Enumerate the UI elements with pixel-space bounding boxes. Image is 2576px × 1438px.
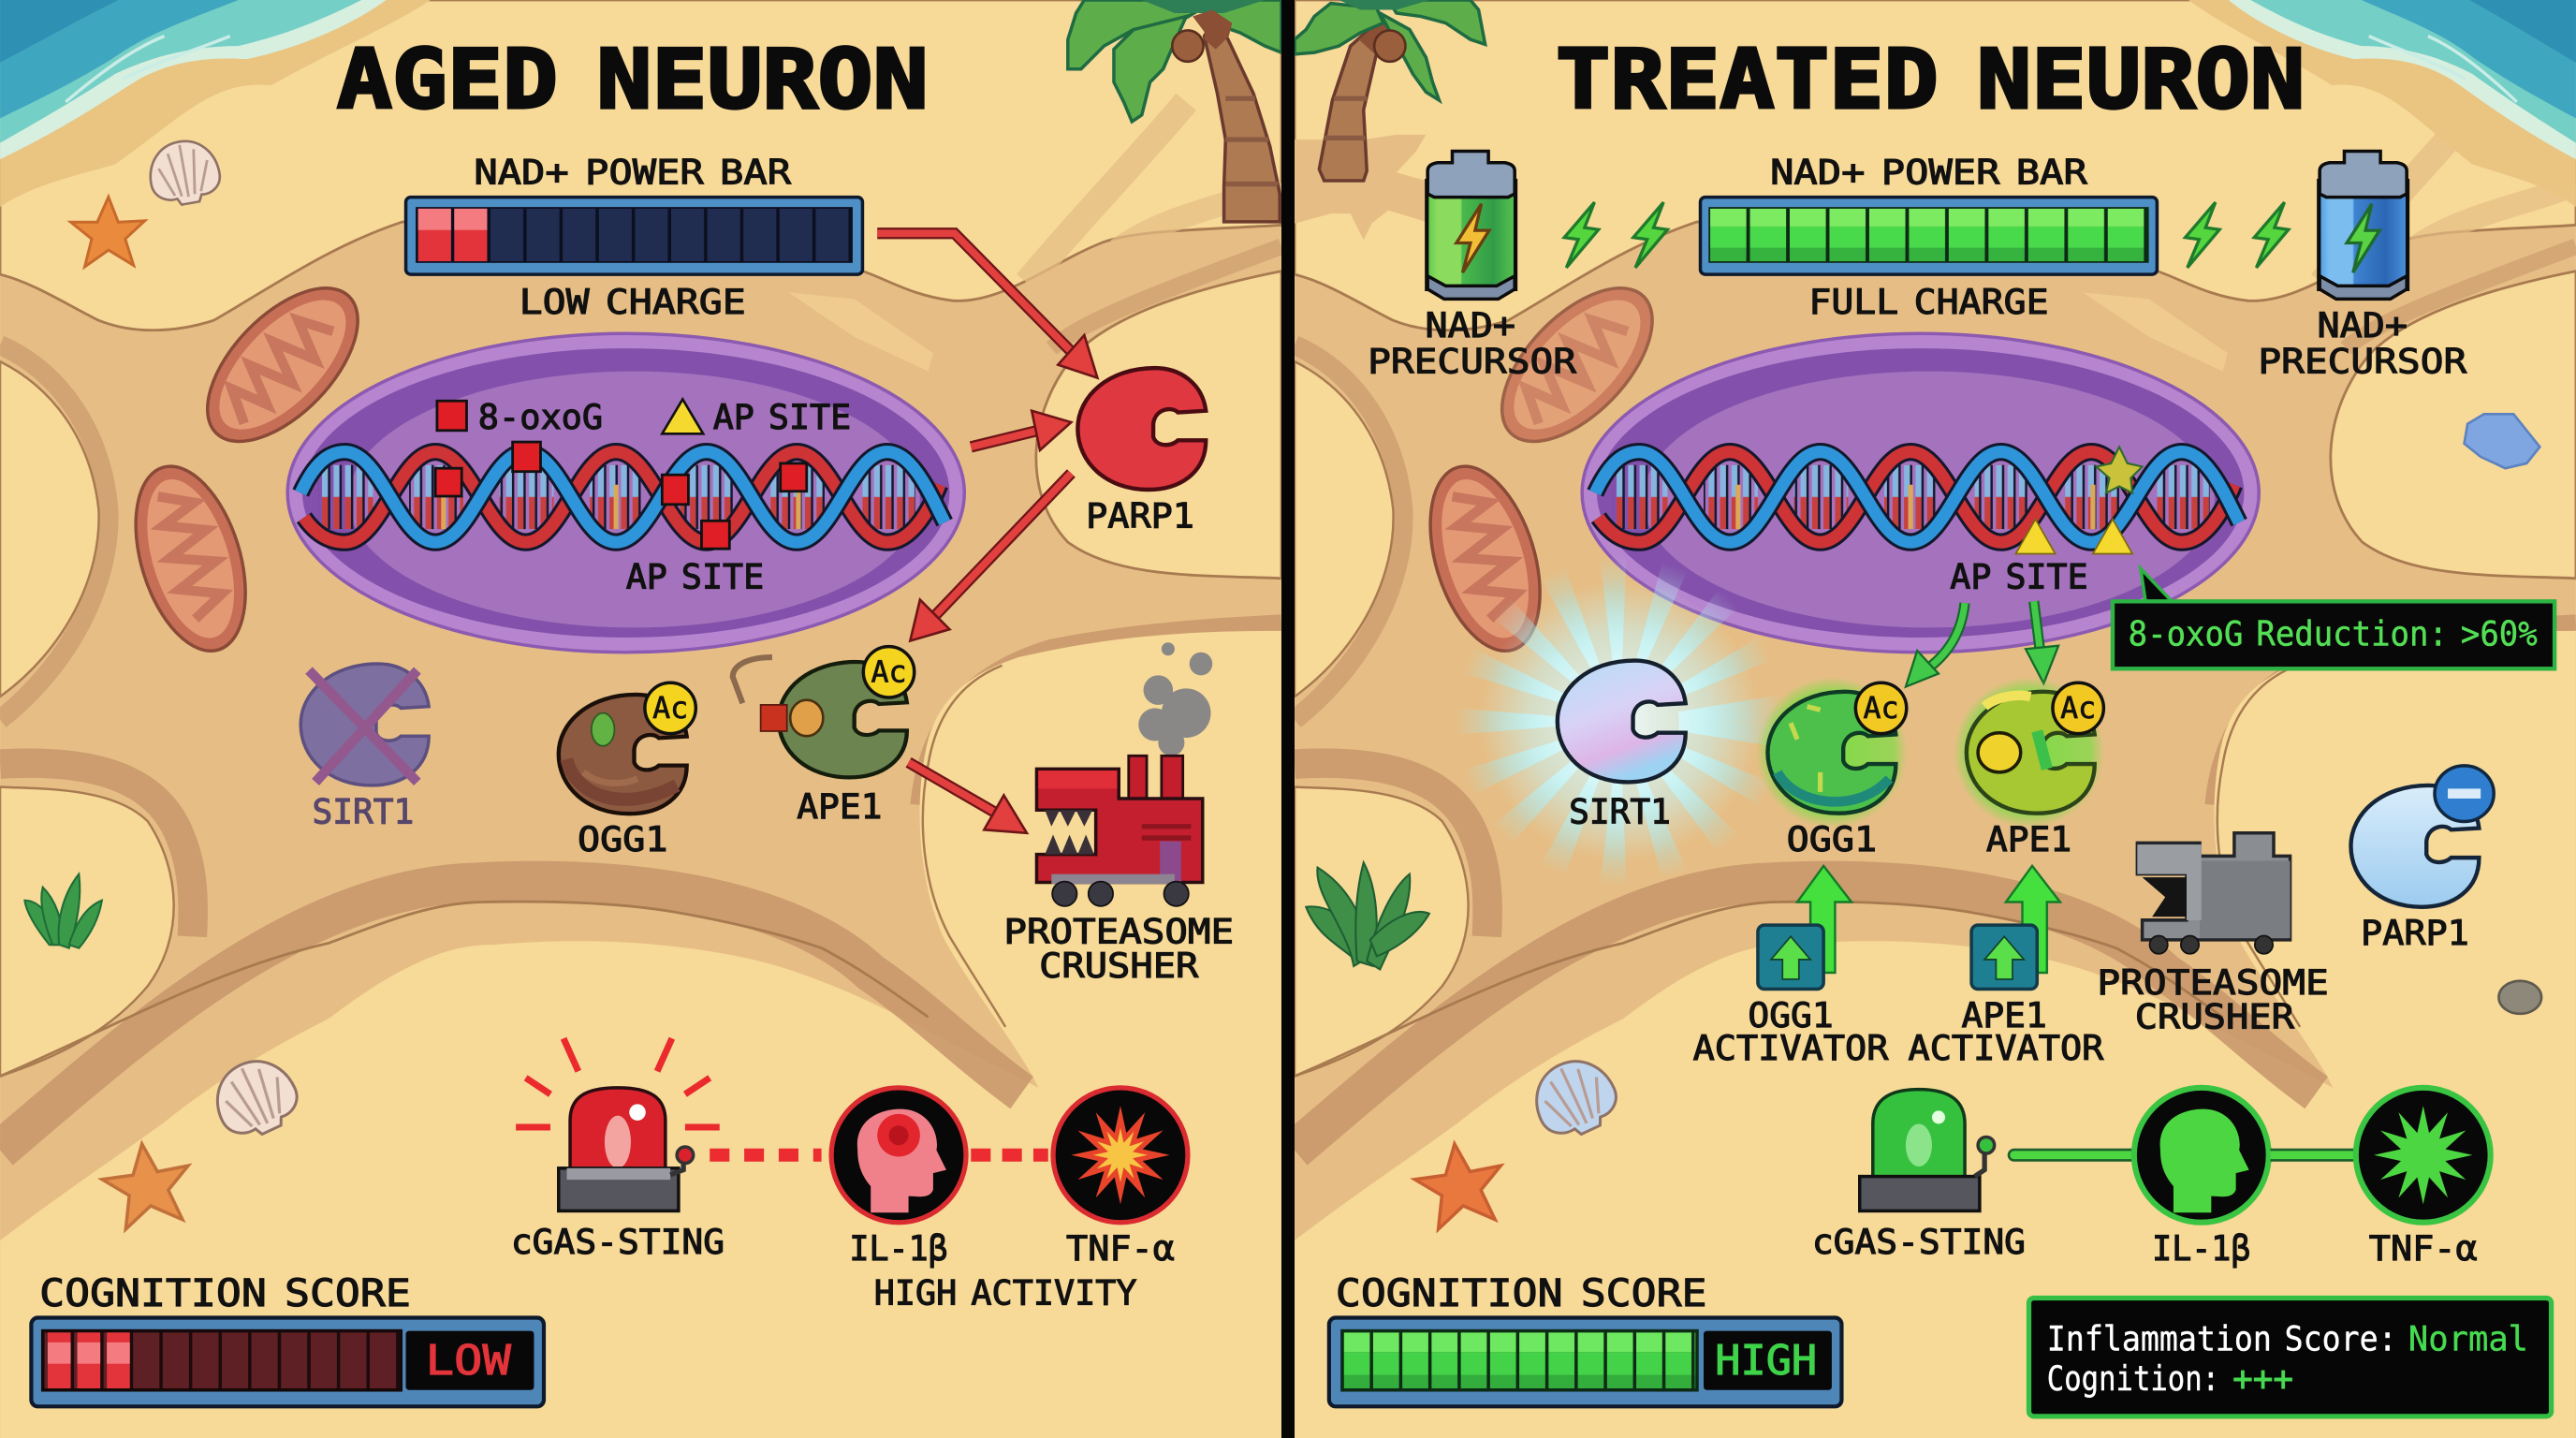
NAD+ power bar: NAD+ POWER BAR <box>1770 153 2088 193</box>
enzyme: APE1 <box>733 647 915 827</box>
legend: 8-oxoG <box>436 399 601 433</box>
APE1 activator: APE1 <box>1962 995 2047 1035</box>
label: IL-1β: IL-1β <box>2152 1228 2250 1269</box>
label: proteasome crusher: PROTEASOME <box>1003 911 1234 951</box>
icon: TNF-α explosion <box>1053 1088 1188 1223</box>
cognition score high: COGNITION SCORE <box>1336 1271 1707 1315</box>
arrow: PARP1 to APE1 <box>910 473 1071 640</box>
label: proteasome crusher: CRUSHER <box>1039 946 1199 986</box>
enzyme: APE1 active <box>1954 677 2104 859</box>
icon: cGAS-STING alarm (green): cGAS-STING <box>1812 1222 2026 1262</box>
acetyl badge: Ac <box>871 655 907 689</box>
icon: NAD+ precursor battery (green) <box>1427 151 1515 299</box>
callout: 8-oxoG reduction: 8-oxoG Reduction: >60% <box>2129 614 2538 654</box>
label: NAD+ precursor: NAD+ <box>2318 305 2408 345</box>
icon: seaweed <box>24 874 102 948</box>
mitochondrion <box>206 286 359 444</box>
nucleus with damaged DNA <box>287 333 964 653</box>
heading: treated neuron: TREATED NEURON <box>1556 32 2305 127</box>
summary panel: inflammation and cognition: Inflammation Score: <box>2047 1319 2397 1359</box>
cognition score low: COGNITION SCORE <box>39 1271 411 1315</box>
enzyme: SIRT1 inactive <box>300 664 429 831</box>
icon: cGAS-STING alarm (green) <box>1812 1090 2026 1262</box>
enzyme: OGG1 <box>559 682 695 859</box>
arrow: DNA to APE1 <box>2026 601 2058 683</box>
icon: cGAS-STING alarm (red) <box>511 1038 724 1262</box>
callout: 8-oxoG reduction <box>2113 568 2554 668</box>
panel: treated neuron (right) <box>1295 0 2576 1438</box>
NAD+ power bar: LOW CHARGE <box>520 282 746 322</box>
nucleus with repaired DNA <box>1582 333 2259 653</box>
sand shadow under palm <box>1295 135 1426 240</box>
signal: line IL-1β to TNF-α <box>2271 1152 2356 1159</box>
APE1 activator <box>1909 866 2104 1068</box>
cognition score high: HIGH <box>1715 1337 1817 1385</box>
signal: dashed line alarm to IL-1β <box>710 1152 822 1159</box>
acetyl badge <box>1855 682 1907 734</box>
icon: seashell <box>149 140 221 206</box>
DNA helix <box>300 452 944 542</box>
enzyme: PARP1 <box>1077 368 1206 536</box>
cognition score low: LOW <box>426 1337 512 1385</box>
beach background with neuron body <box>1295 0 2576 1438</box>
icon: seashell <box>1523 1049 1626 1147</box>
acetyl badge <box>2053 682 2103 734</box>
icon: pebble <box>2498 981 2541 1014</box>
label: IL-1β: IL-1β <box>849 1228 948 1269</box>
label: NAD+ precursor: PRECURSOR <box>2258 341 2467 381</box>
label: NAD+ precursor <box>1368 305 1577 381</box>
label: NAD+ precursor <box>2258 305 2467 381</box>
summary panel: inflammation and cognition: Normal <box>2408 1319 2528 1359</box>
signal: line alarm to IL-1β <box>2014 1152 2136 1159</box>
legend: 8-oxoG: 8-oxoG <box>478 397 603 437</box>
icon: palm tree <box>1295 0 1486 181</box>
AP site markers <box>2015 520 2132 553</box>
OGG1 activator: OGG1 <box>1748 995 1834 1035</box>
acetyl badge: Ac <box>2060 692 2096 726</box>
NAD+ power bar <box>1701 153 2157 322</box>
mitochondrion <box>134 464 247 653</box>
OGG1 activator: ACTIVATOR <box>1693 1028 1889 1068</box>
summary panel: inflammation and cognition: Cognition: <box>2047 1358 2219 1399</box>
enzyme: APE1 active: APE1 <box>1986 819 2071 859</box>
APE1 activator: ACTIVATOR <box>1909 1028 2104 1068</box>
arrow: NAD+ bar to PARP1 <box>877 233 1097 378</box>
heading: aged neuron: AGED NEURON <box>337 32 929 127</box>
summary panel: inflammation and cognition <box>2029 1298 2552 1416</box>
label: high activity: HIGH ACTIVITY <box>874 1272 1137 1313</box>
enzyme: PARP1 inhibited <box>2351 766 2494 953</box>
icon: IL-1β head <box>831 1088 966 1223</box>
ocean shoreline <box>0 0 431 207</box>
divider between panels <box>1281 0 1295 1438</box>
icon: cGAS-STING alarm (red): cGAS-STING <box>511 1222 724 1262</box>
icon: seaweed <box>1306 862 1429 969</box>
inhibitor badge <box>2435 766 2494 822</box>
icon: smoke <box>1138 642 1212 756</box>
enzyme: PARP1 inhibited: PARP1 <box>2361 913 2469 953</box>
NAD+ power bar <box>406 153 862 322</box>
icon: palm tree <box>1068 0 1281 222</box>
legend: AP site: AP SITE <box>713 397 851 437</box>
cognition score high <box>1329 1271 1841 1406</box>
enzyme: OGG1 active: OGG1 <box>1787 819 1877 859</box>
OGG1 activator <box>1693 866 1889 1068</box>
label: NAD+ precursor: PRECURSOR <box>1368 341 1577 381</box>
arrow: APE1 to proteasome crusher <box>909 762 1027 833</box>
acetyl badge: Ac <box>652 692 688 726</box>
cognition score low <box>31 1271 544 1406</box>
label: AP site: AP SITE <box>626 556 764 596</box>
ocean shoreline <box>2188 0 2576 207</box>
icon: IL-1β head calm <box>2134 1088 2269 1223</box>
acetyl badge <box>645 682 695 734</box>
signal: dashed line IL-1β to TNF-α <box>971 1152 1048 1159</box>
icon: seashell <box>215 1060 299 1137</box>
beach background with neuron body <box>0 0 1281 1240</box>
DNA helix <box>1595 452 2239 542</box>
icon: NAD+ precursor battery (blue) <box>2319 151 2408 299</box>
mitochondrion <box>1410 453 1560 664</box>
label: proteasome crusher: PROTEASOME <box>2097 962 2329 1003</box>
enzyme: PARP1: PARP1 <box>1086 495 1194 536</box>
icon: TNF-α calm <box>2356 1088 2491 1223</box>
mitochondrion <box>1475 262 1678 467</box>
acetyl badge: Ac <box>1864 692 1899 726</box>
enzyme: OGG1 active <box>1756 677 1908 859</box>
arrow: DNA to PARP1 <box>971 411 1071 450</box>
label: TNF-α: TNF-α <box>2369 1228 2478 1269</box>
label: proteasome crusher <box>1007 917 1232 979</box>
label: AP site: AP SITE <box>1950 556 2088 596</box>
enzyme: SIRT1 inactive: SIRT1 <box>313 791 414 831</box>
icon: starfish <box>98 1138 196 1231</box>
summary panel: inflammation and cognition: +++ <box>2232 1358 2293 1399</box>
8-oxoG lesions on DNA <box>435 442 807 549</box>
icon: energy bolts <box>2181 198 2292 271</box>
NAD+ power bar: FULL CHARGE <box>1808 282 2049 322</box>
label: proteasome crusher: CRUSHER <box>2135 997 2295 1037</box>
signal: dashed red line to alarm <box>614 875 622 1060</box>
enzyme: APE1: APE1 <box>797 786 883 827</box>
icon: energy bolts <box>1560 198 1671 271</box>
icon: starfish <box>1411 1138 1508 1231</box>
label: NAD+ precursor: NAD+ <box>1426 305 1515 345</box>
icon: starfish <box>71 197 145 267</box>
icon: proteasome crusher (grey) <box>2137 833 2291 954</box>
enzyme: SIRT1 active with glow <box>1480 581 1760 861</box>
label: TNF-α: TNF-α <box>1066 1228 1175 1269</box>
NAD+ power bar: NAD+ POWER BAR <box>474 153 792 193</box>
acetyl badge <box>863 647 915 697</box>
repair spark <box>2096 447 2143 493</box>
arrow: DNA to OGG1 <box>1906 603 1965 687</box>
panel: aged neuron (left) <box>0 0 1281 1438</box>
enzyme: OGG1: OGG1 <box>578 819 667 859</box>
icon: blue coral <box>2465 414 2539 468</box>
icon: proteasome crusher (red) <box>1036 756 1203 906</box>
label: proteasome crusher <box>2097 962 2329 1037</box>
enzyme: SIRT1 active with glow: SIRT1 <box>1569 791 1671 831</box>
